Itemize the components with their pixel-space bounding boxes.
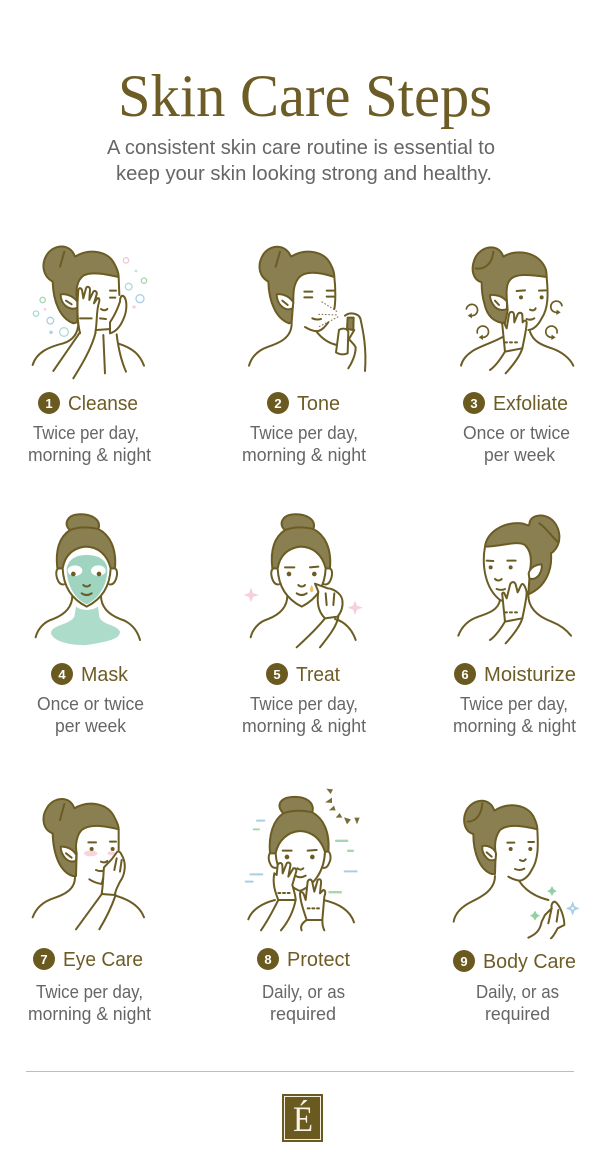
frequency text — [463, 423, 570, 465]
number badge 4 — [51, 663, 73, 685]
subtitle: A consistent skin care routine is essential to — [107, 137, 495, 159]
frequency text: Daily, or as — [476, 982, 559, 1002]
title: Skin Care Steps — [118, 63, 492, 129]
panel: step 9 body care — [453, 801, 580, 1024]
number badge 1: 1 — [45, 396, 53, 411]
number badge 3: 3 — [470, 396, 478, 411]
number badge 3 — [463, 392, 485, 414]
subtitle: keep your skin looking strong and healthy. — [116, 163, 492, 185]
frequency text — [242, 694, 366, 736]
illustration: tone — [249, 247, 365, 371]
number badge 6: 6 — [461, 667, 469, 682]
frequency text: required — [270, 1004, 336, 1024]
illustration: body care — [454, 801, 580, 938]
frequency text — [453, 694, 576, 736]
frequency text: morning & night — [28, 445, 151, 465]
heading: Exfoliate: Exfoliate — [493, 393, 568, 415]
illustration: eye care — [33, 799, 144, 929]
frequency text: morning & night — [453, 716, 576, 736]
frequency text: Daily, or as — [262, 982, 345, 1002]
frequency text — [37, 694, 144, 736]
number badge 6 — [454, 663, 476, 685]
logo — [282, 1094, 323, 1142]
number badge 1 — [38, 392, 60, 414]
number badge 5: 5 — [273, 667, 281, 682]
illustration: cleanse — [33, 246, 147, 378]
illustration: mask — [36, 514, 140, 645]
panel: step 5 treat — [242, 514, 366, 736]
frequency text — [28, 423, 151, 465]
number badge 9 — [453, 950, 475, 972]
number badge 7 — [33, 948, 55, 970]
illustration: moisturize — [458, 516, 571, 643]
frequency text: morning & night — [242, 445, 366, 465]
subtitle — [107, 137, 495, 185]
number badge 7: 7 — [40, 952, 48, 967]
frequency text — [262, 982, 345, 1024]
frequency text: Twice per day, — [250, 694, 358, 714]
illustration: treat — [244, 514, 363, 647]
number badge 2: 2 — [274, 396, 282, 411]
number badge 5 — [266, 663, 288, 685]
illustration: protect — [245, 789, 360, 930]
frequency text: Twice per day, — [36, 982, 143, 1002]
heading: Protect: Protect — [287, 949, 350, 971]
frequency text: Twice per day, — [460, 694, 568, 714]
panel: step 7 eye care — [28, 799, 151, 1024]
frequency text: required — [485, 1004, 550, 1024]
number badge 9: 9 — [460, 954, 468, 969]
number badge 8 — [257, 948, 279, 970]
number badge 4: 4 — [58, 667, 66, 682]
frequency text — [242, 423, 366, 465]
frequency text: per week — [484, 445, 556, 465]
frequency text — [476, 982, 559, 1024]
illustration: exfoliate — [461, 247, 573, 373]
frequency text: Once or twice — [37, 694, 144, 714]
heading: Treat: Treat — [296, 664, 340, 686]
frequency text: morning & night — [242, 716, 366, 736]
panel: step 2 tone — [242, 247, 366, 465]
heading: Moisturize: Moisturize — [484, 664, 576, 686]
number badge 8: 8 — [264, 952, 272, 967]
logo: É — [293, 1099, 313, 1139]
panel: step 1 cleanse — [28, 246, 151, 465]
frequency text: per week — [55, 716, 127, 736]
heading: Eye Care: Eye Care — [63, 949, 143, 971]
panel: step 6 moisturize — [453, 516, 576, 736]
panel: step 8 protect — [245, 789, 360, 1024]
heading: Mask: Mask — [81, 664, 129, 686]
heading: Tone: Tone — [297, 393, 340, 415]
frequency text: Once or twice — [463, 423, 570, 443]
frequency text: morning & night — [28, 1004, 151, 1024]
frequency text — [28, 982, 151, 1024]
heading: Body Care: Body Care — [483, 951, 576, 973]
panel: step 4 mask — [36, 514, 144, 736]
frequency text: Twice per day, — [33, 423, 139, 443]
number badge 2 — [267, 392, 289, 414]
heading: Cleanse: Cleanse — [68, 393, 138, 415]
panel: step 3 exfoliate — [461, 247, 573, 465]
frequency text: Twice per day, — [250, 423, 358, 443]
